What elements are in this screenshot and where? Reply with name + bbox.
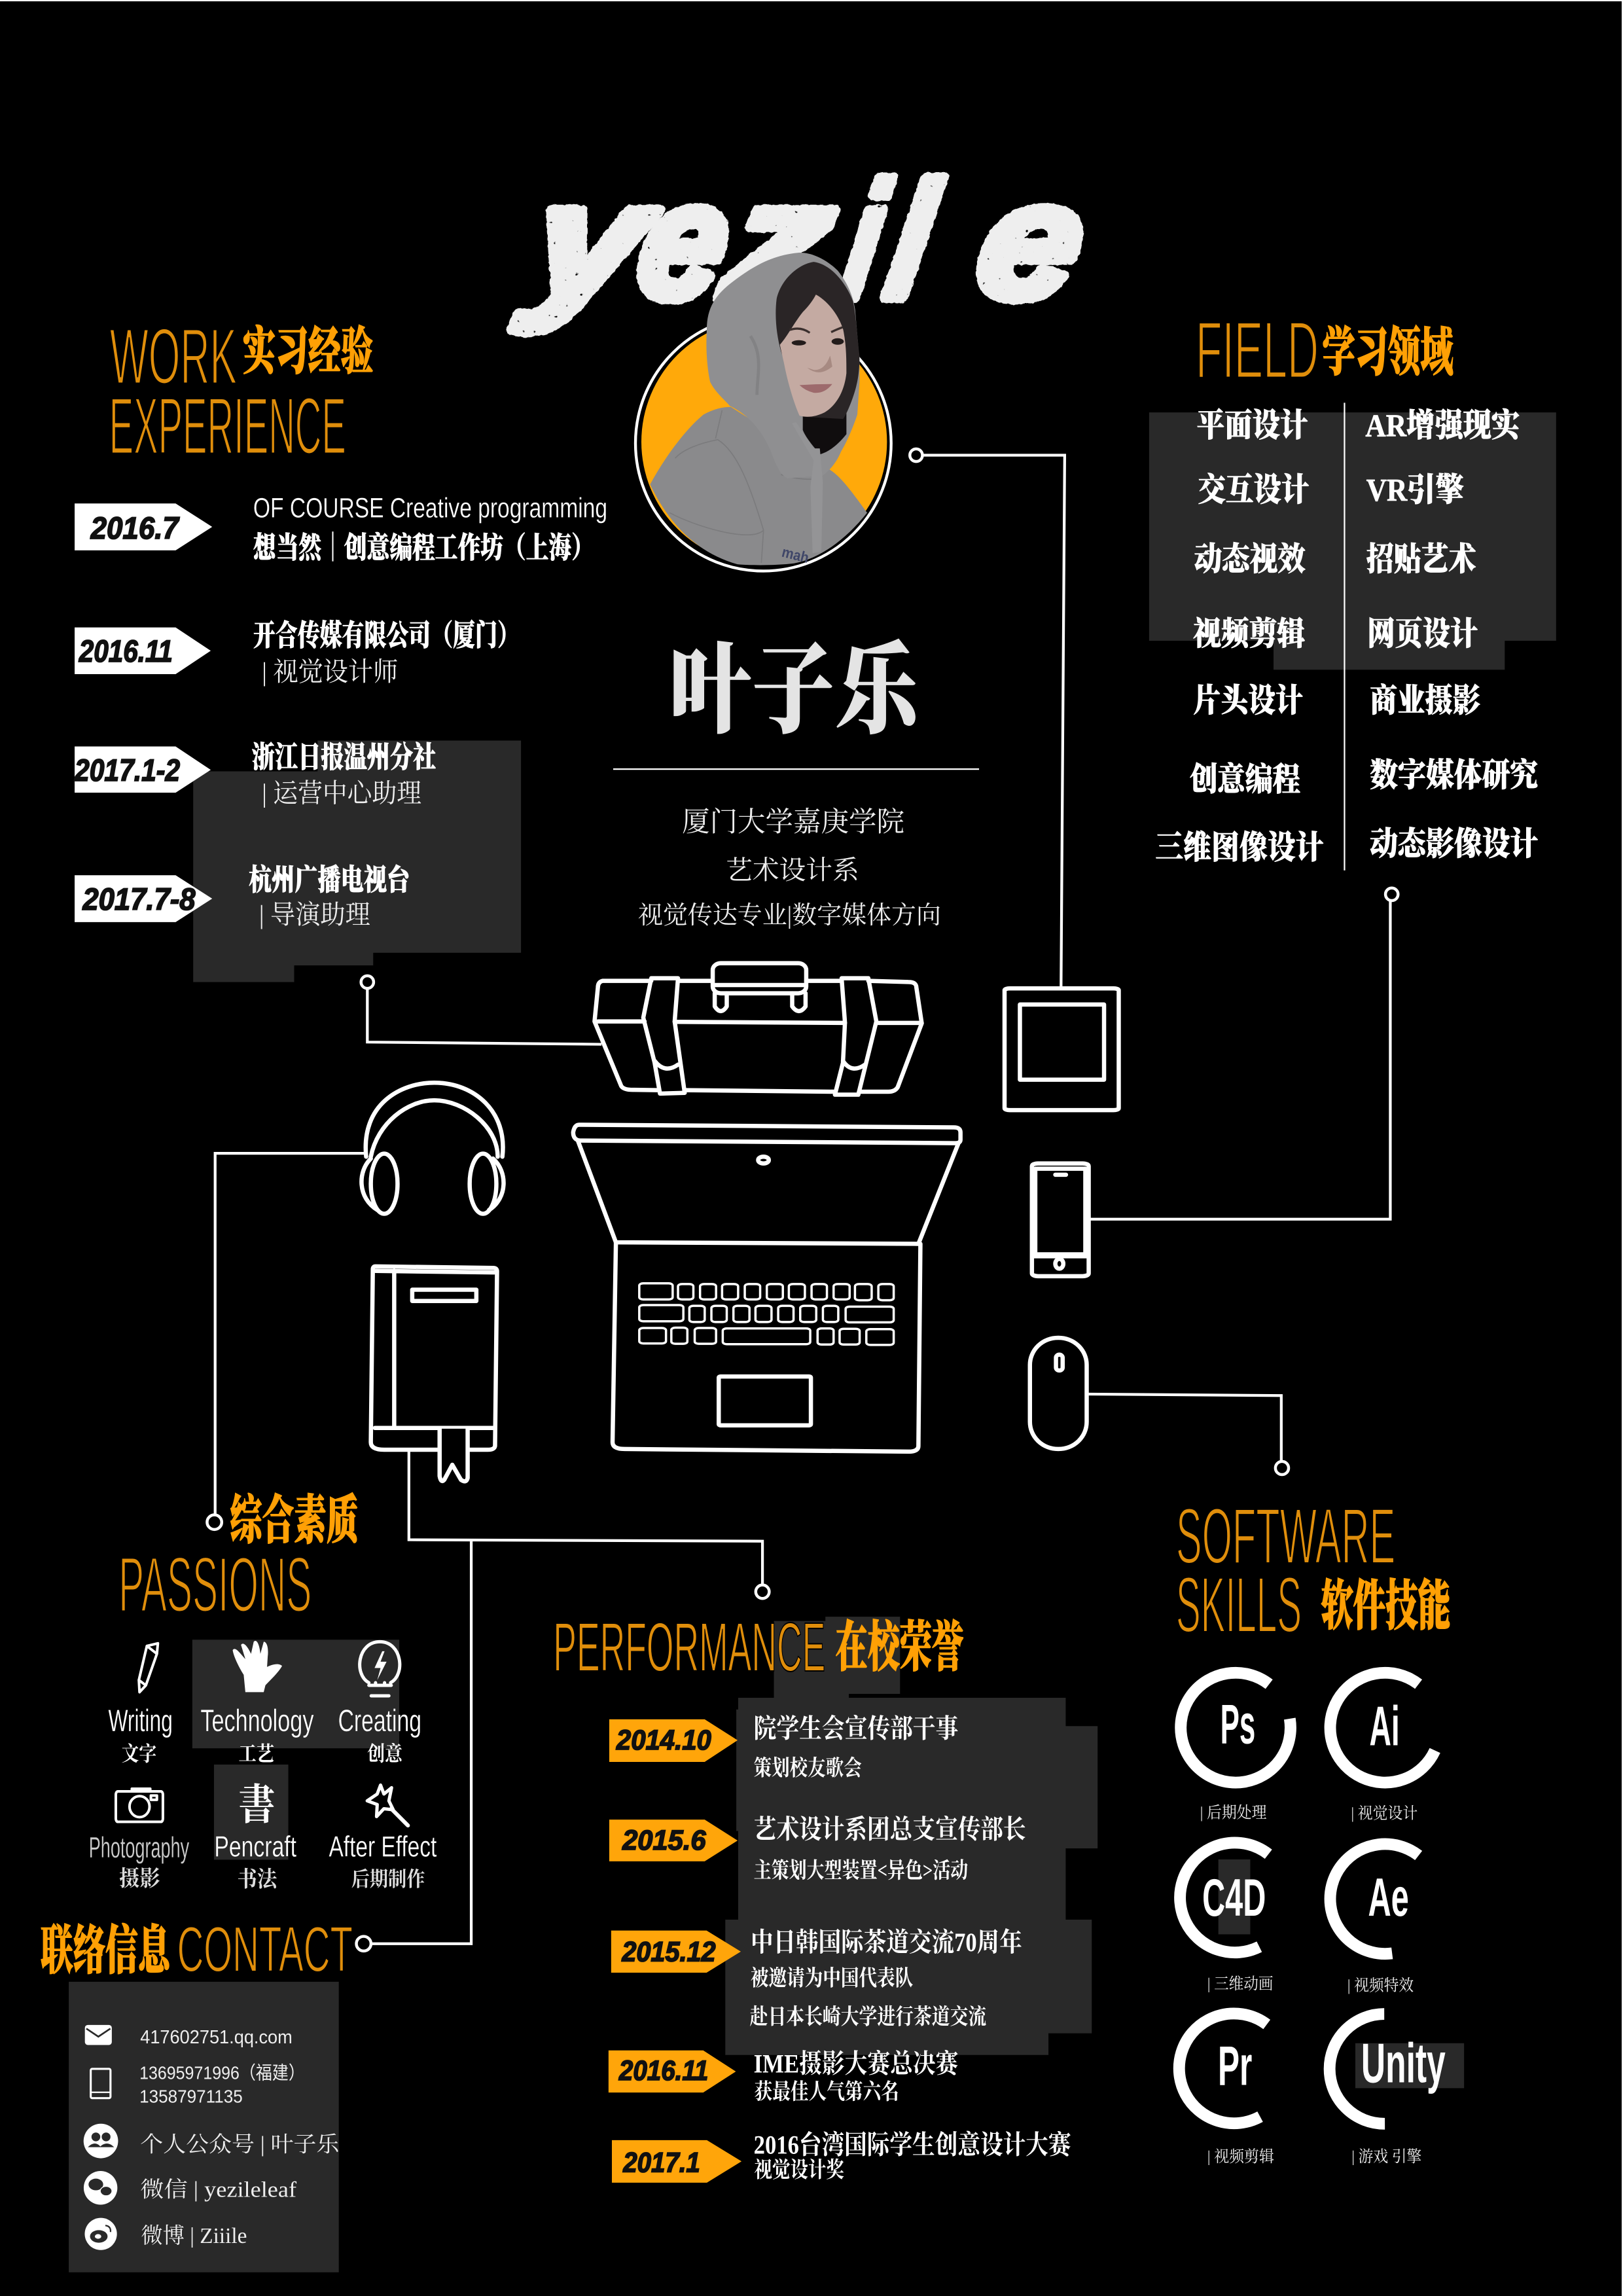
- icon: book: [371, 1266, 497, 1481]
- item: writing: Writing: [108, 1703, 173, 1738]
- heading: work experience: [109, 311, 373, 471]
- item: 2014.10: [609, 1713, 958, 1781]
- brows: [790, 327, 842, 332]
- heading: work experience: WORK: [110, 312, 237, 401]
- item: 2015.12: 中日韩国际茶道交流70周年: [751, 1928, 1022, 1957]
- title: yezile: e: [626, 150, 743, 332]
- field list: 动态视效: [1194, 541, 1306, 577]
- connector: portrait to tablet: [910, 449, 1065, 990]
- timeline: performance: [609, 1713, 1073, 2183]
- email: 417602751.qq.com: [140, 2027, 293, 2048]
- connector: mouse to software: [1088, 1394, 1289, 1475]
- item: after effect: After Effect: [329, 1831, 437, 1863]
- hair: [776, 262, 859, 419]
- eyes: [792, 338, 844, 346]
- icon: laptop: [573, 1124, 961, 1452]
- item: 2015.12: 2015.12: [621, 1937, 716, 1967]
- dark panel: contact backdrop: [69, 1982, 339, 2272]
- heading: passions: [118, 1478, 359, 1628]
- item: after effect: 后期制作: [351, 1867, 425, 1890]
- item: 2014.10: 2014.10: [616, 1725, 711, 1756]
- wechat id: 微信 | yezileleaf: [140, 2178, 297, 2202]
- title: yezile: l: [876, 150, 949, 332]
- skill: Ai: [1312, 1655, 1458, 1823]
- skill: C4D: C4D: [1202, 1869, 1266, 1928]
- hood fold shadow: [751, 336, 758, 395]
- portrait photo in orange circle: [635, 253, 891, 571]
- field list: 动态影像设计: [1370, 826, 1538, 862]
- dark panel: passions backdrop: [192, 1640, 399, 1859]
- item: creating: Creating: [338, 1703, 421, 1738]
- mouth: [800, 384, 832, 393]
- skill: Ps: [1173, 1665, 1298, 1821]
- date tag 2017.7-8: 2017.7-8: [82, 882, 196, 916]
- icon: public account: [84, 2124, 118, 2159]
- item: technology: [200, 1641, 314, 1765]
- field list: VR引擎: [1366, 472, 1464, 508]
- icon: briefcase: [594, 963, 921, 1095]
- education block: 厦门大学嘉庚学院: [682, 807, 904, 838]
- hood: [706, 253, 859, 478]
- item: after effect: [329, 1785, 437, 1890]
- timeline: work experience: [74, 493, 607, 929]
- hoodie body: [650, 407, 867, 565]
- item: photography: [89, 1789, 190, 1891]
- skill: Unity: | 游戏 引擎: [1351, 2147, 1421, 2166]
- field list: 商业摄影: [1370, 683, 1480, 719]
- job 1: OF COURSE Creative programming: [253, 493, 607, 524]
- icon: headphones: [361, 1083, 504, 1214]
- date tag 2017.7-8: [75, 875, 212, 922]
- item: 2015.6: 2015.6: [622, 1825, 706, 1856]
- job 3: [252, 741, 436, 808]
- item: 2016.11: [609, 2049, 960, 2104]
- phone numbers: 13587971135: [139, 2087, 243, 2107]
- job 2: 开合传媒有限公司（厦门）: [253, 619, 520, 652]
- item: 2015.12: 被邀请为中国代表队: [751, 1965, 913, 1990]
- divider under name: [613, 768, 979, 770]
- item: 2016.11: 2016.11: [618, 2056, 708, 2087]
- item: 2016.11: 获最佳人气第六名: [755, 2079, 899, 2104]
- heading: work experience: EXPERIENCE: [109, 382, 346, 471]
- job 4: | 导演助理: [259, 900, 370, 929]
- icon: mobile phone: [91, 2069, 111, 2098]
- heading: software skills: [1176, 1492, 1450, 1649]
- heading: passions: 综合素质: [230, 1478, 359, 1554]
- field list: 平面设计: [1197, 407, 1308, 443]
- heading: contact: 联络信息: [41, 1909, 173, 1984]
- field list: 视频剪辑: [1193, 616, 1305, 652]
- phone numbers: 13695971996（福建）: [139, 2063, 305, 2083]
- icon: envelope: [85, 2025, 112, 2045]
- heading: passions: PASSIONS: [118, 1542, 312, 1628]
- item: 2014.10: 院学生会宣传部干事: [754, 1713, 958, 1743]
- item: photography: 摄影: [119, 1866, 160, 1891]
- field list: AR增强现实: [1365, 407, 1522, 443]
- heading: performance: 在校荣誉: [836, 1604, 964, 1681]
- phone numbers: [139, 2063, 305, 2107]
- item: 2017.1: 2017.1: [622, 2148, 700, 2179]
- skill: Ai: | 视觉设计: [1351, 1804, 1418, 1823]
- skill: Ps: | 后期处理: [1200, 1803, 1267, 1821]
- skill: Pr: | 视频剪辑: [1207, 2147, 1274, 2166]
- job 4: 杭州广播电视台: [249, 864, 412, 897]
- heading: field: FIELD: [1196, 306, 1319, 395]
- title: yezile: z: [712, 150, 846, 332]
- item: 2015.6: 主策划大型装置<异色>活动: [754, 1858, 968, 1883]
- field list: 网页设计: [1367, 616, 1478, 652]
- title: yezile: y: [512, 150, 669, 332]
- item: writing: [108, 1643, 173, 1765]
- icon: weibo: [84, 2218, 117, 2250]
- item: creating: [338, 1641, 421, 1765]
- title: yezile: e: [965, 150, 1097, 332]
- weibo id: 微博 | Ziiile: [141, 2223, 247, 2248]
- date tag 2016.11: 2016.11: [79, 634, 173, 668]
- face: [780, 295, 846, 417]
- item: 2015.12: 赴日本长崎大学进行茶道交流: [750, 2005, 987, 2030]
- item: pencraft: Pencraft: [214, 1831, 296, 1863]
- icon: mouse: [1030, 1338, 1087, 1449]
- item: creating: 创意: [367, 1742, 403, 1765]
- date tag 2017.1-2: [74, 746, 211, 793]
- heading: software skills: 软件技能: [1321, 1562, 1450, 1640]
- dark panel: experience backdrop: [193, 741, 521, 982]
- skill: Ae: [1324, 1838, 1446, 1994]
- connector: phone to field: [1089, 888, 1398, 1219]
- item: photography: Photography: [89, 1832, 190, 1864]
- item: 2017.1: 视觉设计奖: [755, 2157, 844, 2182]
- heading: performance: PERFORMANCE: [553, 1608, 825, 1686]
- job 4: [249, 864, 412, 929]
- item: 2014.10: 策划校友歌会: [754, 1756, 862, 1781]
- software skill rings: [1160, 1655, 1458, 2166]
- heading: field: 学习领域: [1322, 310, 1454, 386]
- date tag 2016.7: [75, 503, 212, 550]
- dark panel: C4D and Unity patches: [1219, 1859, 1464, 2088]
- heading: software skills: SKILLS: [1176, 1560, 1302, 1649]
- title: yezile: [512, 150, 1097, 332]
- date tag 2017.1-2: 2017.1-2: [74, 753, 180, 787]
- item: pencraft: 书法: [237, 1867, 279, 1892]
- item: 2016.11: IME摄影大赛总决赛: [754, 2049, 960, 2079]
- job 2: [253, 619, 520, 687]
- field list: 数字媒体研究: [1370, 757, 1538, 793]
- skill: Pr: Pr: [1218, 2036, 1252, 2098]
- contact list: [84, 2025, 340, 2250]
- field list: 招贴艺术: [1366, 541, 1476, 577]
- field list: 交互设计: [1198, 472, 1309, 508]
- skill: Pr: [1160, 1994, 1308, 2166]
- job 3: 浙江日报温州分社: [252, 741, 436, 774]
- skill: Unity: Unity: [1361, 2032, 1446, 2094]
- icon: wechat: [84, 2171, 117, 2204]
- item: writing: 文字: [122, 1742, 156, 1765]
- item: 2015.6: [609, 1815, 1026, 1883]
- date tag 2016.11: [75, 628, 211, 674]
- item: pencraft: [214, 1782, 296, 1892]
- field list: 片头设计: [1193, 683, 1303, 719]
- hoodie seams: [669, 410, 821, 563]
- item: 2017.1: 2016台湾国际学生创意设计大赛: [754, 2130, 1073, 2160]
- heading: software skills: SOFTWARE: [1176, 1492, 1395, 1580]
- nose shadow: [807, 355, 832, 372]
- hood drawstring: [792, 422, 823, 553]
- skill: Ai: Ai: [1369, 1695, 1400, 1757]
- item: 2015.6: 艺术设计系团总支宣传部长: [754, 1815, 1026, 1844]
- item: 2017.1: [612, 2130, 1073, 2183]
- skill: Ae: Ae: [1368, 1867, 1409, 1928]
- heading: contact: [41, 1909, 353, 1985]
- heading: contact: CONTACT: [177, 1913, 353, 1985]
- heading: work experience: 实习经验: [243, 311, 373, 384]
- item: technology: 工艺: [239, 1742, 274, 1765]
- job 1: 想当然｜创意编程工作坊（上海）: [253, 531, 594, 564]
- dark panel: performance backdrop: [725, 1617, 1097, 2055]
- dark under hair: [803, 395, 846, 454]
- skill: Ae: | 视频特效: [1347, 1976, 1414, 1994]
- job 3: | 运营中心助理: [262, 778, 421, 808]
- passions icon grid: [89, 1641, 437, 1892]
- job 2: | 视觉设计师: [262, 657, 398, 687]
- name: 叶子乐: 叶子乐: [669, 636, 926, 746]
- item: 2015.12: [611, 1928, 1022, 2030]
- field list: 创意编程: [1190, 762, 1300, 798]
- title: yezile: i: [832, 150, 899, 332]
- date tag 2016.7: 2016.7: [90, 511, 180, 545]
- icons: desk items: [361, 963, 1118, 1481]
- item: technology: Technology: [200, 1703, 314, 1738]
- dark panel: field backdrop: [1149, 412, 1556, 670]
- hoodie lettering: mah: [780, 543, 811, 566]
- connector: headphones to passions: [207, 1153, 365, 1530]
- skill: Ps: Ps: [1221, 1693, 1255, 1755]
- connector: book to performance and contact: [357, 1449, 769, 1951]
- field list: [1155, 403, 1538, 870]
- field list: 三维图像设计: [1155, 830, 1323, 866]
- skill: C4D: | 三维动画: [1207, 1975, 1274, 1993]
- education block: [638, 807, 941, 929]
- public account name: 个人公众号 | 叶子乐: [140, 2132, 340, 2157]
- icon: tablet: [1005, 988, 1118, 1110]
- job 1: [253, 493, 607, 564]
- education block: 视觉传达专业|数字媒体方向: [638, 902, 941, 929]
- skill: C4D: [1162, 1824, 1308, 1993]
- skill: Unity: [1330, 2014, 1446, 2166]
- item: pencraft: 書: [239, 1782, 275, 1829]
- education block: 艺术设计系: [726, 855, 859, 885]
- connector: case to experience: [361, 976, 601, 1045]
- icon: phone: [1032, 1164, 1089, 1276]
